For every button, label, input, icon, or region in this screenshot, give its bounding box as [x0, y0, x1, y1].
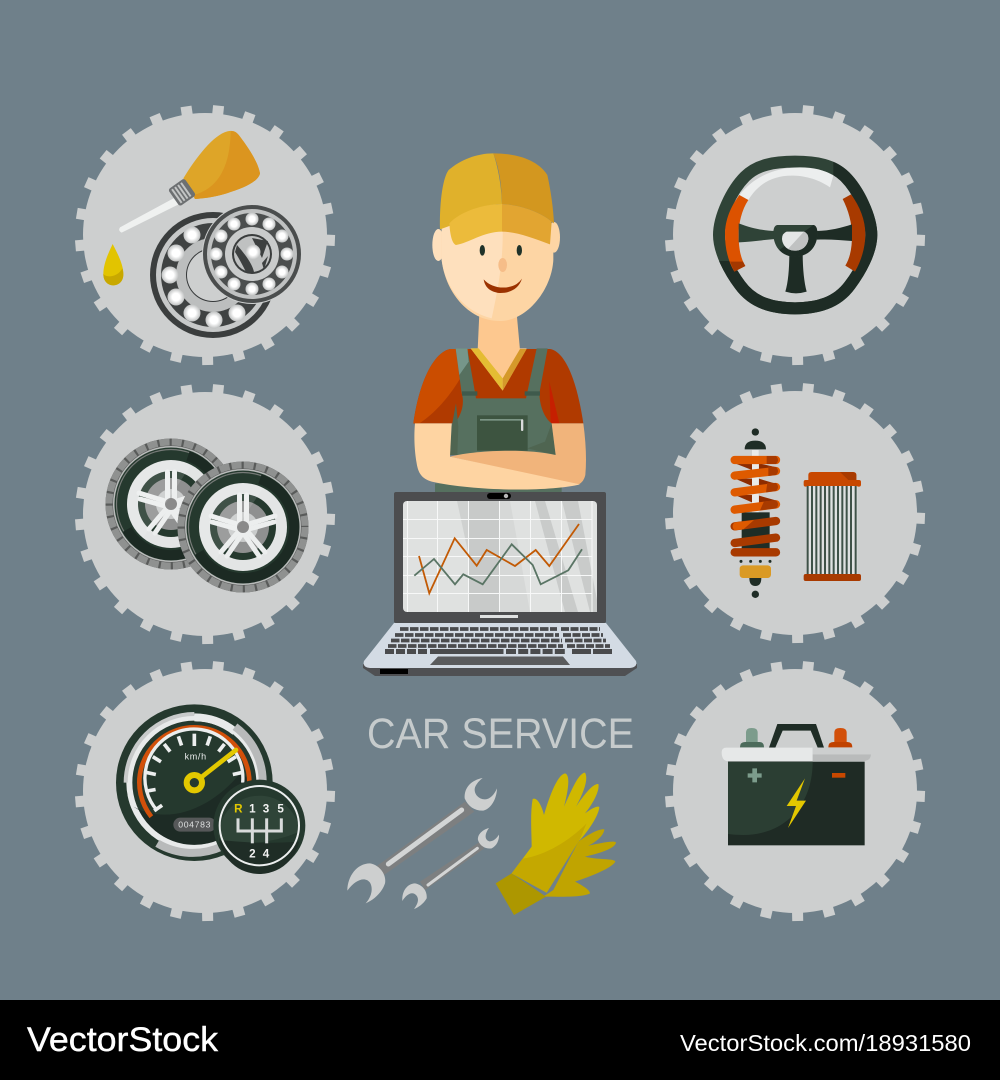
mechanic: pocket	[477, 415, 528, 451]
panel: oil and bearings	[75, 105, 335, 365]
icon: gear shift knob: 2	[249, 847, 256, 860]
title: CAR SERVICE	[367, 710, 634, 758]
panel: steering wheel	[665, 105, 925, 365]
laptop: base	[363, 623, 637, 676]
icon: speedometer: km/h	[185, 752, 207, 762]
icon: steering wheel	[719, 162, 871, 308]
icon: shock absorber	[733, 428, 778, 598]
laptop: display with line chart	[403, 501, 597, 612]
mechanic: neck opening	[471, 348, 527, 391]
icon: front wheel	[178, 462, 308, 592]
watermark footer bar	[0, 1000, 1000, 1080]
icon: large wrench	[347, 778, 497, 903]
icon: gear shift knob: 5	[277, 803, 284, 816]
chart: green line	[414, 544, 582, 584]
icon: back wheel	[106, 438, 236, 570]
chart: orange line	[419, 524, 579, 593]
panel: shock absorber and filter	[665, 383, 925, 643]
icon: oil filter	[804, 472, 861, 581]
icon: large bearing	[150, 212, 276, 338]
icon: gear shift knob: 1	[249, 803, 256, 816]
mechanic: smile	[484, 279, 522, 293]
mechanic: arms	[414, 423, 586, 490]
icon: gear shift knob	[213, 780, 305, 874]
icon: small wrench	[402, 828, 499, 909]
mechanic: ears	[432, 222, 560, 261]
laptop: webcam	[487, 493, 511, 499]
laptop: touchpad	[430, 656, 570, 665]
icon: speedometer: 004783	[178, 820, 211, 830]
mechanic: lower overalls	[435, 483, 562, 493]
mechanic: face	[442, 223, 553, 321]
icon: gear shift knob: 4	[263, 847, 270, 860]
panel: speedometer and gearbox	[75, 661, 335, 921]
icon: oil bottle	[119, 131, 260, 233]
mechanic: shirt	[413, 349, 583, 423]
laptop: keyboard	[385, 629, 613, 652]
laptop: screen bezel	[394, 492, 606, 623]
panel: wheels	[75, 384, 335, 644]
watermark: image id: VectorStock.com/18931580	[680, 1030, 971, 1056]
icon: gloves	[496, 773, 616, 915]
icon: oil drop	[103, 244, 123, 285]
icon: gear shift knob: R	[234, 803, 243, 816]
icon: gear shift knob: 3	[263, 803, 270, 816]
mechanic: overalls bib	[450, 348, 556, 455]
icon: speedometer	[116, 704, 273, 861]
laptop: trackbar	[480, 615, 518, 618]
icon: small bearing	[202, 204, 302, 304]
mechanic: neck	[478, 313, 520, 350]
mechanic: eyes	[480, 245, 522, 256]
mechanic: collar	[471, 348, 527, 391]
laptop	[363, 492, 637, 676]
icon: car battery	[722, 724, 871, 845]
mechanic: cap	[440, 153, 554, 245]
panel: battery	[665, 661, 925, 921]
mechanic: nose	[498, 258, 507, 272]
watermark: brand: VectorStock	[27, 1021, 219, 1059]
mechanic figure	[413, 153, 586, 493]
